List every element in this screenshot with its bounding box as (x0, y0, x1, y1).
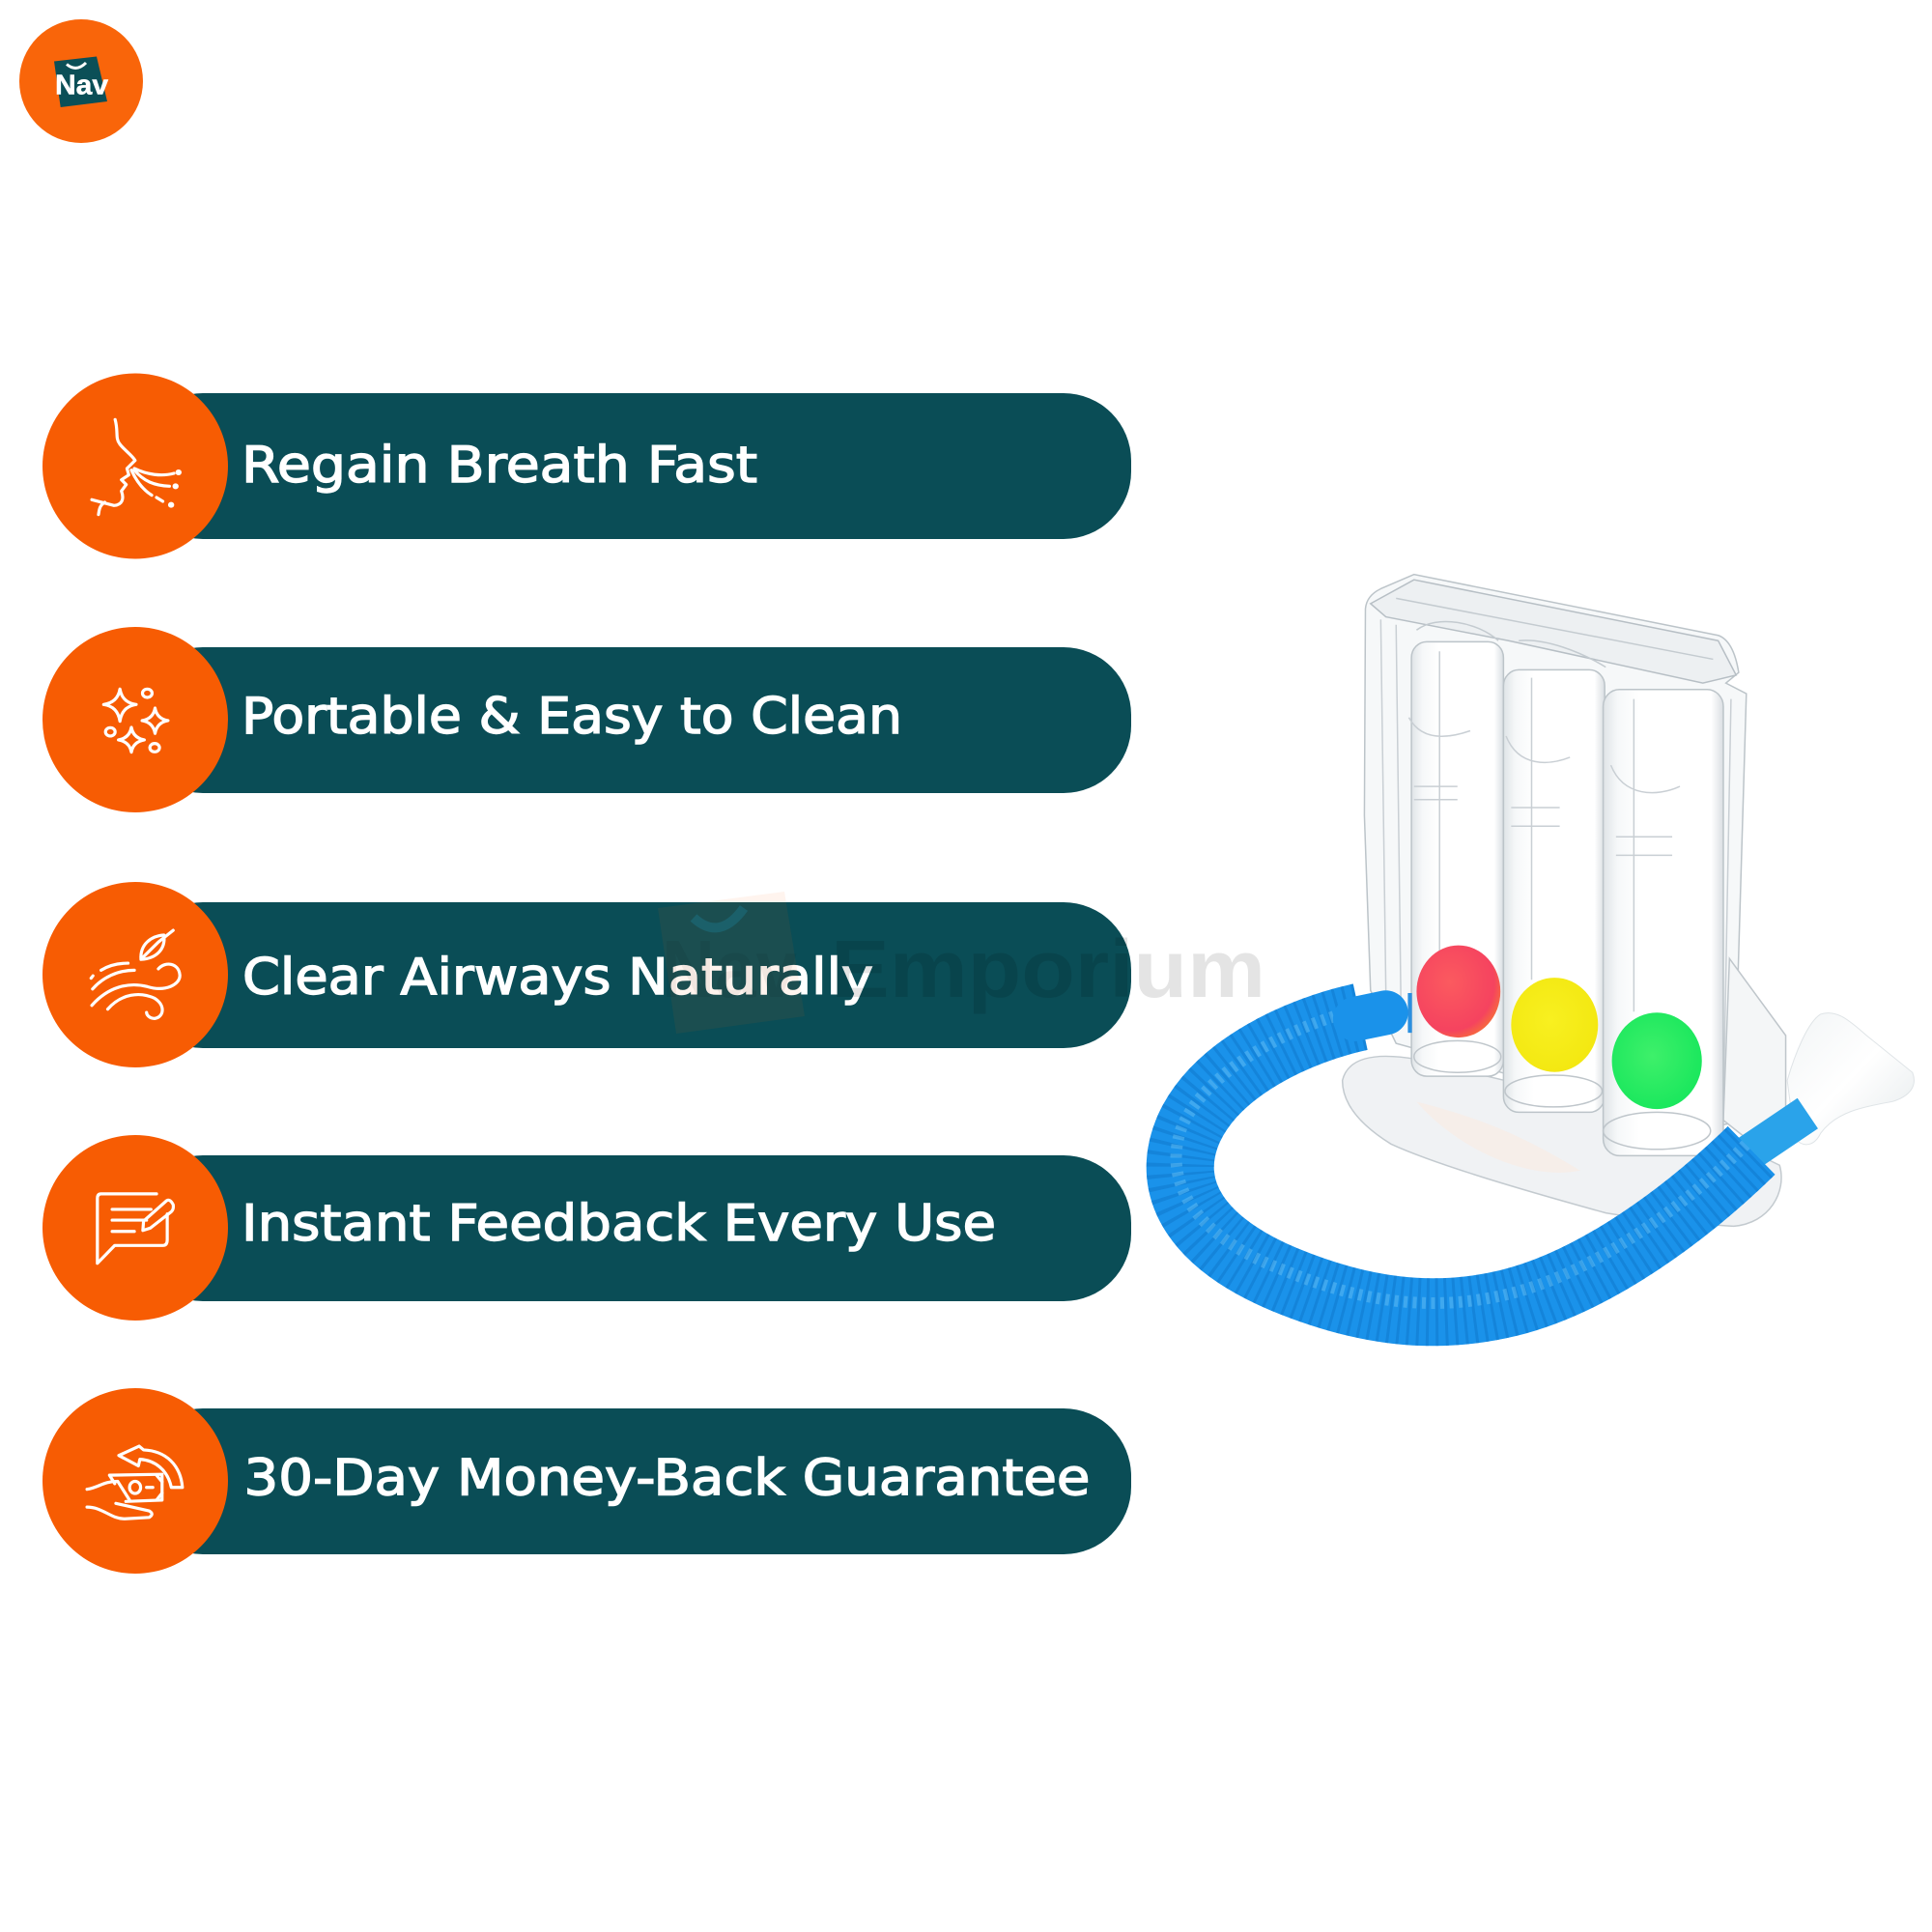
label: 30-Day Money-Back Guarantee (243, 1449, 1090, 1507)
label: Portable & Easy to Clean (242, 688, 902, 746)
side wedge (1723, 958, 1786, 1150)
hose (1177, 1009, 1751, 1312)
red ball (1416, 946, 1500, 1037)
icon: sparkles (103, 689, 168, 753)
icon: feedback speech bubble (98, 1194, 173, 1264)
label: Instant Feedback Every Use (242, 1195, 996, 1253)
top ledge (1371, 580, 1736, 683)
watermark (658, 892, 1265, 1034)
mouthpiece (1787, 1013, 1914, 1145)
tube 2 (1503, 669, 1605, 1112)
feature row: Regain Breath Fast (43, 373, 1131, 558)
logo badge: Nav (55, 70, 108, 100)
feature row: Portable & Easy to Clean (43, 627, 1131, 812)
label: Regain Breath Fast (242, 437, 757, 495)
watermark: Emporium (831, 923, 1265, 1014)
feature row: Instant Feedback Every Use (43, 1135, 1131, 1321)
yellow ball (1511, 978, 1598, 1072)
icon: wind and leaf (91, 930, 180, 1018)
feature row: 30-Day Money-Back Guarantee (43, 1388, 1131, 1574)
product: three-ball breathing exerciser (1177, 575, 1914, 1312)
feature row: Clear Airways Naturally (43, 882, 1131, 1067)
green ball (1612, 1012, 1702, 1109)
back plate ribs (1380, 619, 1731, 1112)
hose right collar (1739, 1114, 1807, 1160)
icon: money back hand (87, 1446, 183, 1519)
label: Clear Airways Naturally (242, 949, 873, 1007)
tube 1 (1407, 641, 1503, 1076)
base plate (1343, 1056, 1781, 1226)
tube 3 (1604, 690, 1723, 1155)
icon: face breathing (92, 419, 179, 515)
base reflection (1416, 1101, 1580, 1173)
logo badge (19, 19, 143, 143)
back plate (1364, 575, 1747, 1128)
watermark: Nav (662, 923, 797, 1014)
